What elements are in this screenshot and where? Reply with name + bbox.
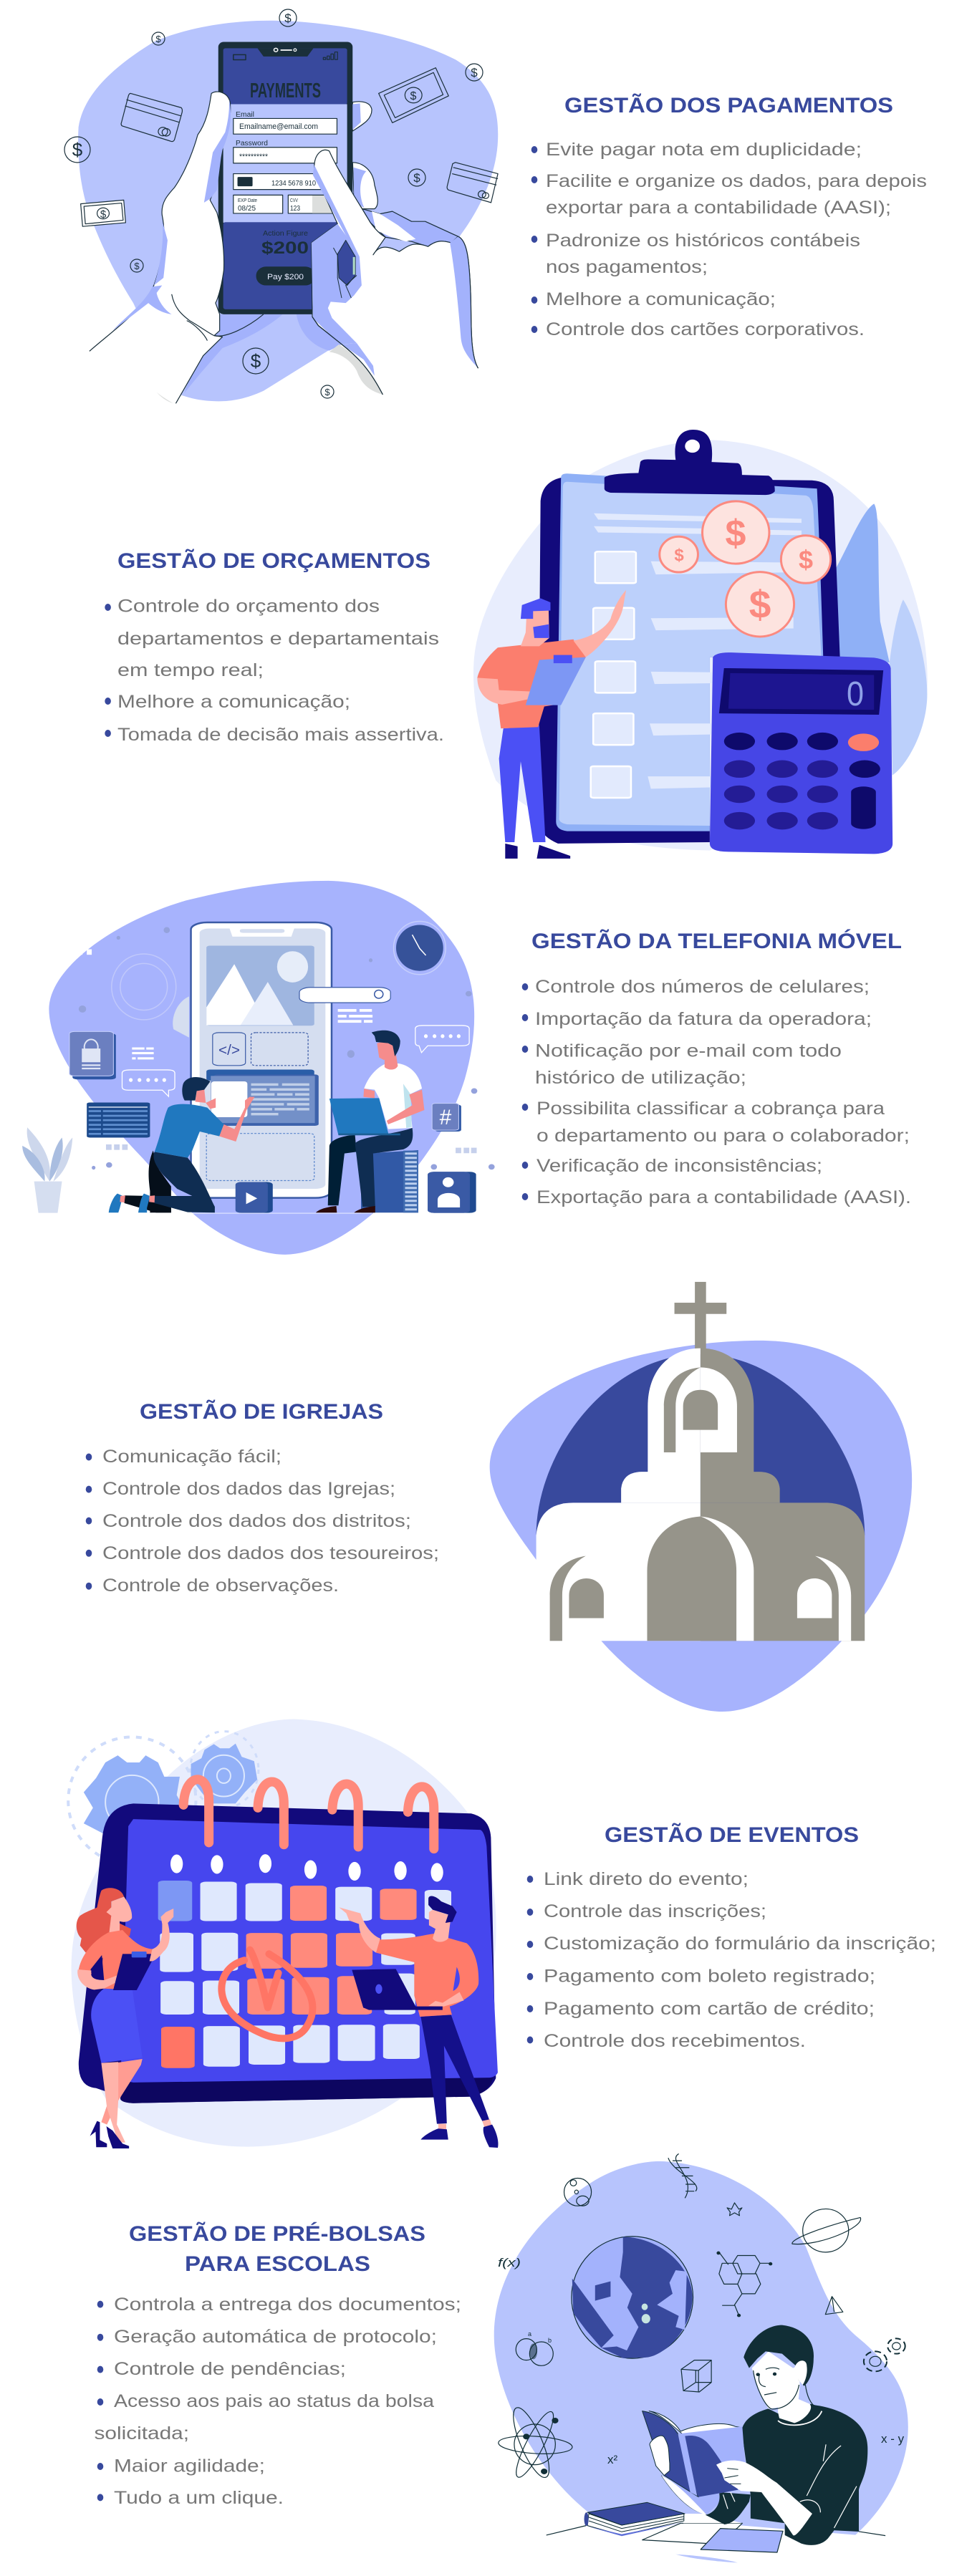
- heading: GESTÃO DOS PAGAMENTOS: [564, 93, 893, 117]
- icon labels: code and hashtag: </>: [218, 1043, 240, 1058]
- icons: dollar coins: $: [471, 66, 478, 79]
- math notation: a: [528, 2330, 531, 2338]
- coin dollar signs: $: [674, 546, 684, 565]
- list: Evite pagar nota em duplicidade;: [546, 140, 862, 160]
- list: exportar para a contabilidade (AASI);: [546, 198, 891, 218]
- heading: GESTÃO DA TELEFONIA MÓVEL: [531, 929, 902, 953]
- list: [522, 977, 911, 1207]
- list: Controle dos números de celulares;: [535, 977, 870, 997]
- phone screen labels: Action Figure: [263, 230, 308, 238]
- math notation: b: [548, 2337, 552, 2344]
- icon labels: code and hashtag: [218, 1043, 452, 1129]
- phone screen labels: PAYMENTS: [250, 79, 321, 102]
- phone screen labels: Pay $200: [267, 273, 304, 281]
- list: solicitada;: [95, 2423, 189, 2444]
- list: Controle dos dados das Igrejas;: [102, 1479, 395, 1499]
- panel: gestão de eventos: [68, 1719, 936, 2148]
- heading: GESTÃO DE IGREJAS: [140, 1399, 383, 1424]
- list: Tudo a um clique.: [114, 2488, 284, 2508]
- list: [105, 596, 444, 745]
- phone screen labels: Emailname@email.com: [239, 122, 318, 131]
- list: Padronize os históricos contábeis: [546, 231, 860, 251]
- panel: gestão de orçamentos: [105, 430, 928, 859]
- icons: dollar coins: $: [410, 90, 417, 102]
- list: Possibilita classificar a cobrança para: [536, 1099, 885, 1119]
- list: Link direto do evento;: [544, 1869, 749, 1889]
- heading: [129, 2222, 425, 2276]
- illustration: student reading at desk: [498, 2297, 905, 2552]
- phone screen labels: 1234 5678 910: [271, 180, 316, 188]
- icons: dollar coins: [64, 9, 483, 398]
- heading: GESTÃO DE PRÉ-BOLSAS: [129, 2222, 425, 2246]
- list: Controle dos recebimentos.: [544, 2031, 806, 2051]
- phone screen labels: 08/25: [238, 205, 256, 213]
- list: Controle dos dados dos tesoureiros;: [102, 1543, 439, 1563]
- icons: dollar coins: $: [284, 11, 292, 25]
- list: Tomada de decisão mais assertiva.: [117, 725, 444, 745]
- calculator display digit: 0: [847, 675, 864, 713]
- coin dollar signs: $: [749, 582, 771, 627]
- list: Controle dos dados dos distritos;: [102, 1511, 411, 1531]
- list: Geração automática de protocolo;: [114, 2327, 437, 2347]
- list: Controle das inscrições;: [544, 1901, 766, 1921]
- list: departamentos e departamentais: [117, 629, 439, 649]
- illustration: globe and science icons: [494, 2153, 908, 2562]
- list: Melhore a comunicação;: [546, 289, 776, 309]
- list: Exportação para a contabilidade (AASI).: [536, 1187, 911, 1207]
- list: Verificação de inconsistências;: [536, 1156, 822, 1176]
- list: Pagamento com boleto registrado;: [544, 1967, 875, 1987]
- list: histórico de utilização;: [535, 1068, 746, 1088]
- coin dollar signs: $: [726, 513, 746, 554]
- list: Maior agilidade;: [114, 2456, 265, 2476]
- phone screen labels: EXP Date: [238, 198, 257, 203]
- list: Customização do formulário da inscrição;: [544, 1934, 936, 1954]
- list: Controle dos cartões corporativos.: [546, 319, 865, 339]
- list: [95, 2295, 461, 2508]
- icon labels: code and hashtag: #: [440, 1106, 452, 1129]
- list: Controle de observações.: [102, 1576, 339, 1596]
- list: Controla a entrega dos documentos;: [114, 2295, 461, 2315]
- panel: gestão da telefonia móvel: [22, 881, 911, 1255]
- icons: dollar coins: $: [134, 261, 140, 271]
- list: Pagamento com cartão de crédito;: [544, 1999, 875, 2019]
- heading: GESTÃO DE EVENTOS: [605, 1823, 859, 1847]
- math notation: f(x): [498, 2256, 521, 2269]
- illustration: church: [490, 1282, 912, 1712]
- phone screen labels: CVV: [290, 198, 298, 203]
- heading: PARA ESCOLAS: [185, 2252, 370, 2276]
- list: Comunicação fácil;: [102, 1447, 282, 1467]
- heading: GESTÃO DE ORÇAMENTOS: [117, 549, 430, 573]
- list: [86, 1447, 439, 1596]
- panel: gestão dos pagamentos: [64, 9, 927, 403]
- illustration: clipboard, calculator and man: [473, 430, 928, 859]
- list: em tempo real;: [117, 660, 264, 680]
- icons: dollar coins: $: [100, 208, 107, 221]
- panel: gestão de pré-bolsas para escolas: [95, 2153, 908, 2562]
- list: o departamento ou para o colaborador;: [536, 1126, 910, 1146]
- math notation: x²: [607, 2453, 617, 2466]
- illustration: two people working: [109, 1031, 424, 1212]
- illustration: hands holding phone: [78, 21, 498, 403]
- list: Importação da fatura da operadora;: [535, 1009, 872, 1029]
- list: Acesso aos pais ao status da bolsa: [114, 2391, 434, 2411]
- illustration: calendar: [68, 1719, 498, 2147]
- math notation: x - y: [881, 2432, 905, 2446]
- phone screen labels: Password: [236, 140, 268, 148]
- panel: gestão de igrejas: [86, 1282, 912, 1712]
- icons: dollar coins: $: [251, 350, 261, 372]
- math notation: [498, 2256, 905, 2466]
- icons: dollar coins: $: [155, 34, 161, 44]
- list: [527, 1869, 936, 2051]
- phone screen labels: **********: [239, 153, 269, 161]
- list: Notificação por e-mail com todo: [535, 1041, 842, 1061]
- list: Controle de pendências;: [114, 2359, 346, 2379]
- icons: dollar coins: $: [72, 139, 83, 160]
- phone screen labels: 123: [290, 205, 300, 213]
- icons: dollar coins: $: [413, 171, 420, 185]
- list: Facilite e organize os dados, para depois: [546, 171, 927, 191]
- list: [531, 140, 927, 339]
- coin dollar signs: $: [799, 545, 813, 574]
- illustration: app development screen: [22, 881, 495, 1255]
- illustration: check mark and two people: [77, 1888, 498, 2148]
- list: Melhore a comunicação;: [117, 692, 350, 712]
- phone screen labels: [236, 79, 321, 281]
- list: nos pagamentos;: [546, 257, 708, 277]
- icons: dollar coins: $: [324, 387, 330, 397]
- coin dollar signs: [674, 513, 813, 627]
- list: Controle do orçamento dos: [117, 596, 380, 616]
- phone screen labels: $200: [261, 238, 309, 258]
- phone screen labels: Email: [236, 111, 254, 119]
